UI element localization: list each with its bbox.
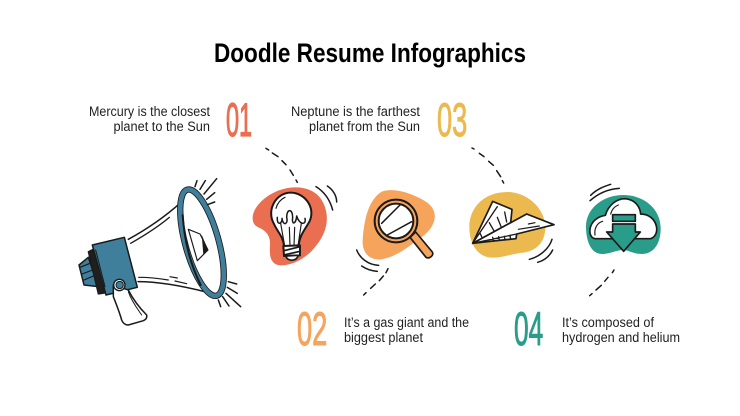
number 04: 04: [514, 304, 543, 356]
number 02: 02: [297, 303, 327, 356]
icon: megaphone: [79, 179, 241, 325]
text: item 2: [344, 315, 469, 345]
icon: paper plane on yellow blob: [469, 148, 554, 262]
text: item 2: biggest planet: [344, 330, 423, 345]
icon: cloud download on teal blob: [586, 184, 661, 296]
text: item 3: Neptune is the farthest: [291, 104, 420, 119]
title: Doodle Resume Infographics: [214, 38, 526, 68]
icon: magnifying glass on orange blob: [357, 190, 435, 295]
text: item 1: Mercury is the closest: [89, 104, 210, 119]
icon: light bulb on red blob: [253, 148, 337, 265]
number 03: 03: [437, 94, 467, 147]
number 01: 01: [226, 93, 252, 146]
text: item 1: [89, 104, 210, 134]
text: item 4: It’s composed of: [562, 315, 654, 330]
text: item 4: [562, 315, 680, 345]
text: item 1: planet to the Sun: [114, 119, 210, 134]
text: item 3: planet from the Sun: [309, 119, 420, 134]
text: item 4: hydrogen and helium: [562, 330, 680, 345]
text: item 3: [291, 104, 420, 134]
text: item 2: It’s a gas giant and the: [344, 315, 469, 330]
